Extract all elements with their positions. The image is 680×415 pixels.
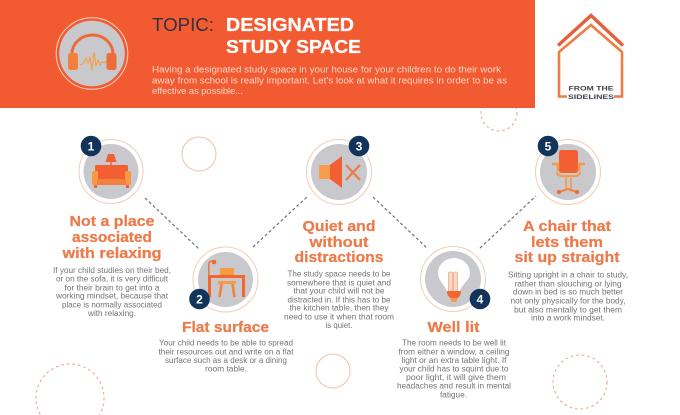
body text 3: need to use it when that room (284, 312, 394, 322)
body text 4 (397, 338, 511, 400)
dashed connector 1 to 2 (145, 198, 199, 249)
badge 3 (349, 136, 369, 156)
heading 5: lets them (531, 234, 603, 251)
logo: from the sidelines (558, 16, 623, 101)
heading 5: A chair that (523, 218, 611, 235)
intro text: Having a designated study space in your house for your children to do their work (152, 64, 501, 76)
heading: topic (152, 14, 361, 57)
body text 1: working mindset, because that (55, 292, 169, 300)
heading 1: Not a place (70, 213, 154, 230)
heading 3: without (308, 234, 368, 251)
icon: office chair (536, 140, 600, 204)
icon: light bulb (420, 246, 486, 312)
body text 4: poor light, it will give them (406, 373, 506, 382)
decorative dashed circle, top right (481, 95, 517, 131)
body text 1: with relaxing. (87, 309, 136, 318)
heading: topic: TOPIC: (152, 14, 214, 35)
heading: topic: STUDY SPACE (226, 36, 361, 57)
decorative circle, dashed lower left (36, 364, 104, 415)
heading 2: Flat surface (182, 319, 269, 336)
body text 5: not only physically for the body, (510, 296, 626, 306)
intro text: effective as possible... (152, 86, 243, 97)
logo: from the sidelines: FROM THE (568, 86, 614, 92)
heading 1 (61, 213, 162, 262)
body text 5: Sitting upright in a chair to study, (508, 270, 628, 280)
body text 5: rather than slouching or lying (514, 280, 622, 288)
body text 5: but also mentally to get them (514, 306, 622, 314)
heading: topic: DESIGNATED (226, 14, 354, 35)
body text 1: or on the sofa, it is very difficult (56, 274, 169, 284)
body text 3: that your child will not be (294, 286, 385, 296)
badge 4 (470, 289, 490, 309)
badge 4: 4 (477, 292, 484, 306)
body text 4: light or an extra table light. If (402, 356, 507, 365)
body text 2 (158, 338, 294, 374)
body text 3: the kitchen table, then they (290, 304, 388, 312)
step 3: speaker (284, 136, 394, 330)
body text 1: place is normally associated (62, 300, 162, 310)
logo: from the sidelines: SIDELINES (568, 94, 615, 101)
badge 5 (538, 136, 558, 156)
body text 3: somewhere that is quiet and (287, 278, 391, 288)
icon: headphones (56, 18, 128, 89)
icon: muted speaker (306, 140, 372, 204)
heading 1: associated (72, 229, 152, 246)
body text 1: for their brain to get into a (64, 284, 160, 292)
step 1: sofa (53, 136, 171, 318)
heading 5 (514, 218, 620, 266)
heading 3: distractions (294, 249, 384, 266)
body text 2: their resources out and write on a flat (158, 348, 294, 356)
step 4: light bulb (397, 246, 511, 400)
header banner (0, 0, 535, 108)
body text 3: is quiet. (326, 321, 352, 330)
body text 3: The study space needs to be (288, 270, 391, 278)
icon: desk (193, 247, 258, 312)
dashed connector 4 to 5 (480, 196, 536, 248)
icon: sofa (79, 140, 143, 204)
dashed connector 3 to 4 (373, 197, 428, 249)
body text 4: fatigue. (440, 390, 467, 400)
body text 4: your child has to squint due to (400, 364, 509, 374)
body text 1: If your child studies on their bed, (53, 266, 171, 275)
body text 5: into a work mindset. (531, 314, 605, 322)
body text 1 (53, 266, 171, 318)
decorative circle, solid lower (316, 354, 350, 388)
step 2: desk (158, 247, 294, 374)
decorative circle, dashed lower right (553, 355, 607, 409)
heading 1: with relaxing (61, 245, 162, 262)
intro text (152, 64, 507, 97)
decorative circle, solid upper (182, 137, 216, 171)
badge 1: 1 (88, 139, 95, 153)
body text 2: Your child needs to be able to spread (159, 338, 293, 348)
body text 4: from either a window, a ceiling (398, 348, 510, 356)
badge 3: 3 (356, 139, 363, 153)
step 5: chair (508, 136, 628, 322)
intro text: away from school is really important. Let's look at what it requires in order to be as (152, 76, 507, 86)
heading 3: Quiet and (302, 218, 376, 235)
body text 5 (508, 270, 628, 322)
body text 5: down in bed is so much better (513, 288, 623, 296)
body text 3: distracted in. If this has to be (288, 296, 391, 304)
heading 3 (294, 218, 384, 266)
body text 4: The room needs to be well lit (402, 338, 507, 348)
badge 5: 5 (545, 139, 552, 153)
badge 1 (81, 136, 101, 156)
heading 5: sit up straight (514, 249, 620, 266)
body text 3 (284, 270, 394, 330)
body text 4: headaches and result in mental (397, 382, 511, 390)
badge 2: 2 (196, 292, 203, 306)
heading 4: Well lit (428, 319, 480, 336)
body text 2: surface such as a desk or a dining (165, 356, 287, 365)
body text 2: room table. (205, 364, 247, 374)
dashed connector 2 to 3 (253, 196, 308, 247)
